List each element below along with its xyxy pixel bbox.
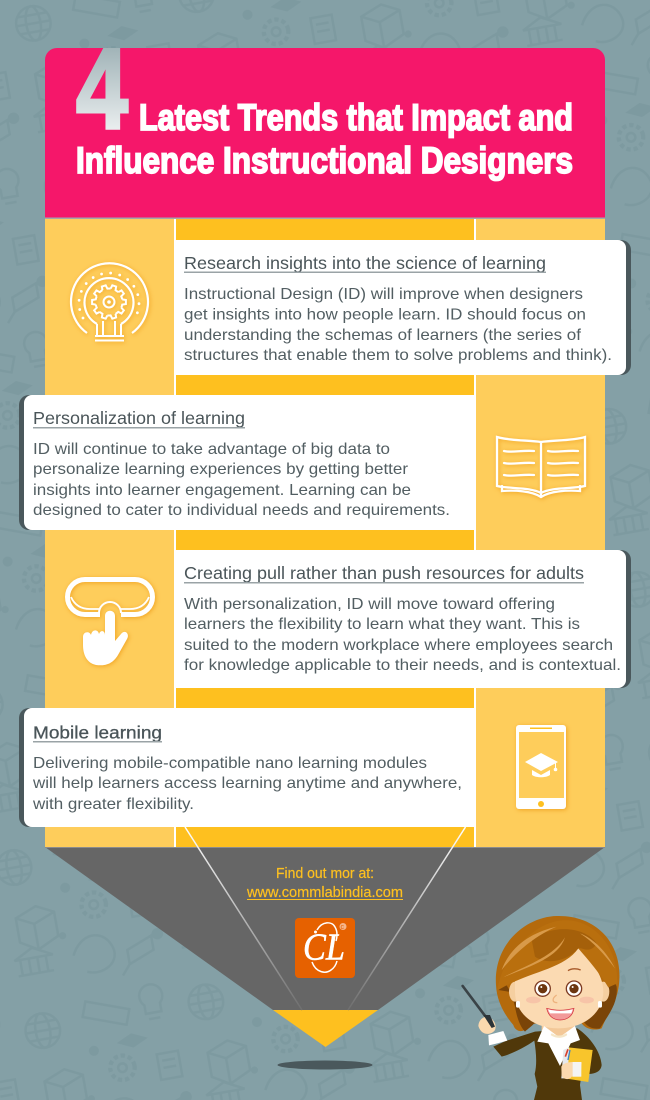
back hair [496, 916, 619, 1031]
body text [184, 596, 621, 674]
body text: Delivering mobile-compatible nano learning modules [33, 755, 427, 772]
nose [553, 995, 557, 1003]
fringe [497, 920, 617, 991]
body text: learners the flexibility to learn what they want. This is [184, 616, 580, 633]
icon: open book [497, 437, 585, 497]
cuff [488, 1031, 507, 1045]
logo [295, 918, 355, 978]
body text: With personalization, ID will move toward offering [184, 596, 555, 613]
icon: lightbulb with gear [71, 263, 148, 340]
body text: with greater flexibility. [32, 796, 194, 813]
body text: Instructional Design (ID) will improve when designers [184, 286, 583, 303]
body text: suited to the modern workplace where employees search [184, 637, 613, 654]
heading: Mobile learning [33, 722, 162, 742]
panel: research insights [176, 240, 631, 375]
collar and shirt [537, 1026, 580, 1066]
panel: pull resources [176, 550, 631, 688]
icon: hand pressing button [68, 580, 152, 665]
necklace [552, 1035, 566, 1037]
icon: smartphone with graduation cap [516, 725, 566, 809]
footer text [246, 866, 403, 901]
heading: Personalization of learning [33, 408, 245, 428]
body text: structures that enable them to solve problems and think). [184, 347, 612, 364]
body text: understanding the schemas of learners (the series of [184, 327, 582, 344]
panel: personalization [19, 395, 474, 530]
body text: designed to cater to individual needs and requirements. [33, 502, 450, 519]
neck [542, 1017, 575, 1043]
footer text: www.commlabindia.com [246, 884, 403, 901]
character: teacher with pointer [463, 916, 619, 1100]
body text [184, 286, 612, 364]
body text: personalize learning experiences by getting better [33, 461, 409, 478]
hand [478, 1017, 496, 1034]
heading: Creating pull rather than push resources for adults [184, 563, 584, 583]
heading: Research insights into the science of learning [184, 253, 546, 273]
body text: get insights into how people learn. ID should focus on [184, 306, 586, 324]
body text: insights into learner engagement. Learning can be [33, 482, 411, 499]
logo: c [340, 924, 344, 931]
footer text: Find out mor at: [276, 866, 374, 882]
gear [92, 284, 126, 320]
folder [565, 1047, 593, 1082]
body text: will help learners access learning anytime and anywhere, [32, 775, 462, 792]
holding hand [561, 1062, 582, 1079]
logo: CL [303, 926, 345, 968]
funnel beams [185, 827, 466, 1010]
blush [526, 997, 541, 1003]
panel: mobile learning [19, 708, 474, 827]
title line 1: Latest Trends that Impact and [139, 97, 573, 138]
body text: for knowledge applicable to their needs, and is contextual. [184, 657, 621, 674]
funnel tip [273, 1010, 378, 1047]
ears [509, 982, 521, 1002]
columns [45, 218, 605, 848]
body text: ID will continue to take advantage of big data to [33, 441, 390, 458]
jacket [493, 1028, 602, 1100]
floor shadow [278, 1060, 372, 1070]
big number 4: 4 [76, 24, 128, 154]
pointer stick [463, 986, 493, 1026]
body text [32, 755, 462, 813]
face [515, 948, 603, 1028]
mouth [547, 1008, 574, 1020]
title banner [45, 48, 605, 219]
body text [33, 441, 450, 519]
footer funnel [45, 847, 605, 1047]
earrings [516, 1001, 520, 1008]
graduation cap [525, 753, 558, 777]
eyes [535, 969, 582, 996]
title line 2: Influence Instructional Designers [76, 140, 573, 181]
